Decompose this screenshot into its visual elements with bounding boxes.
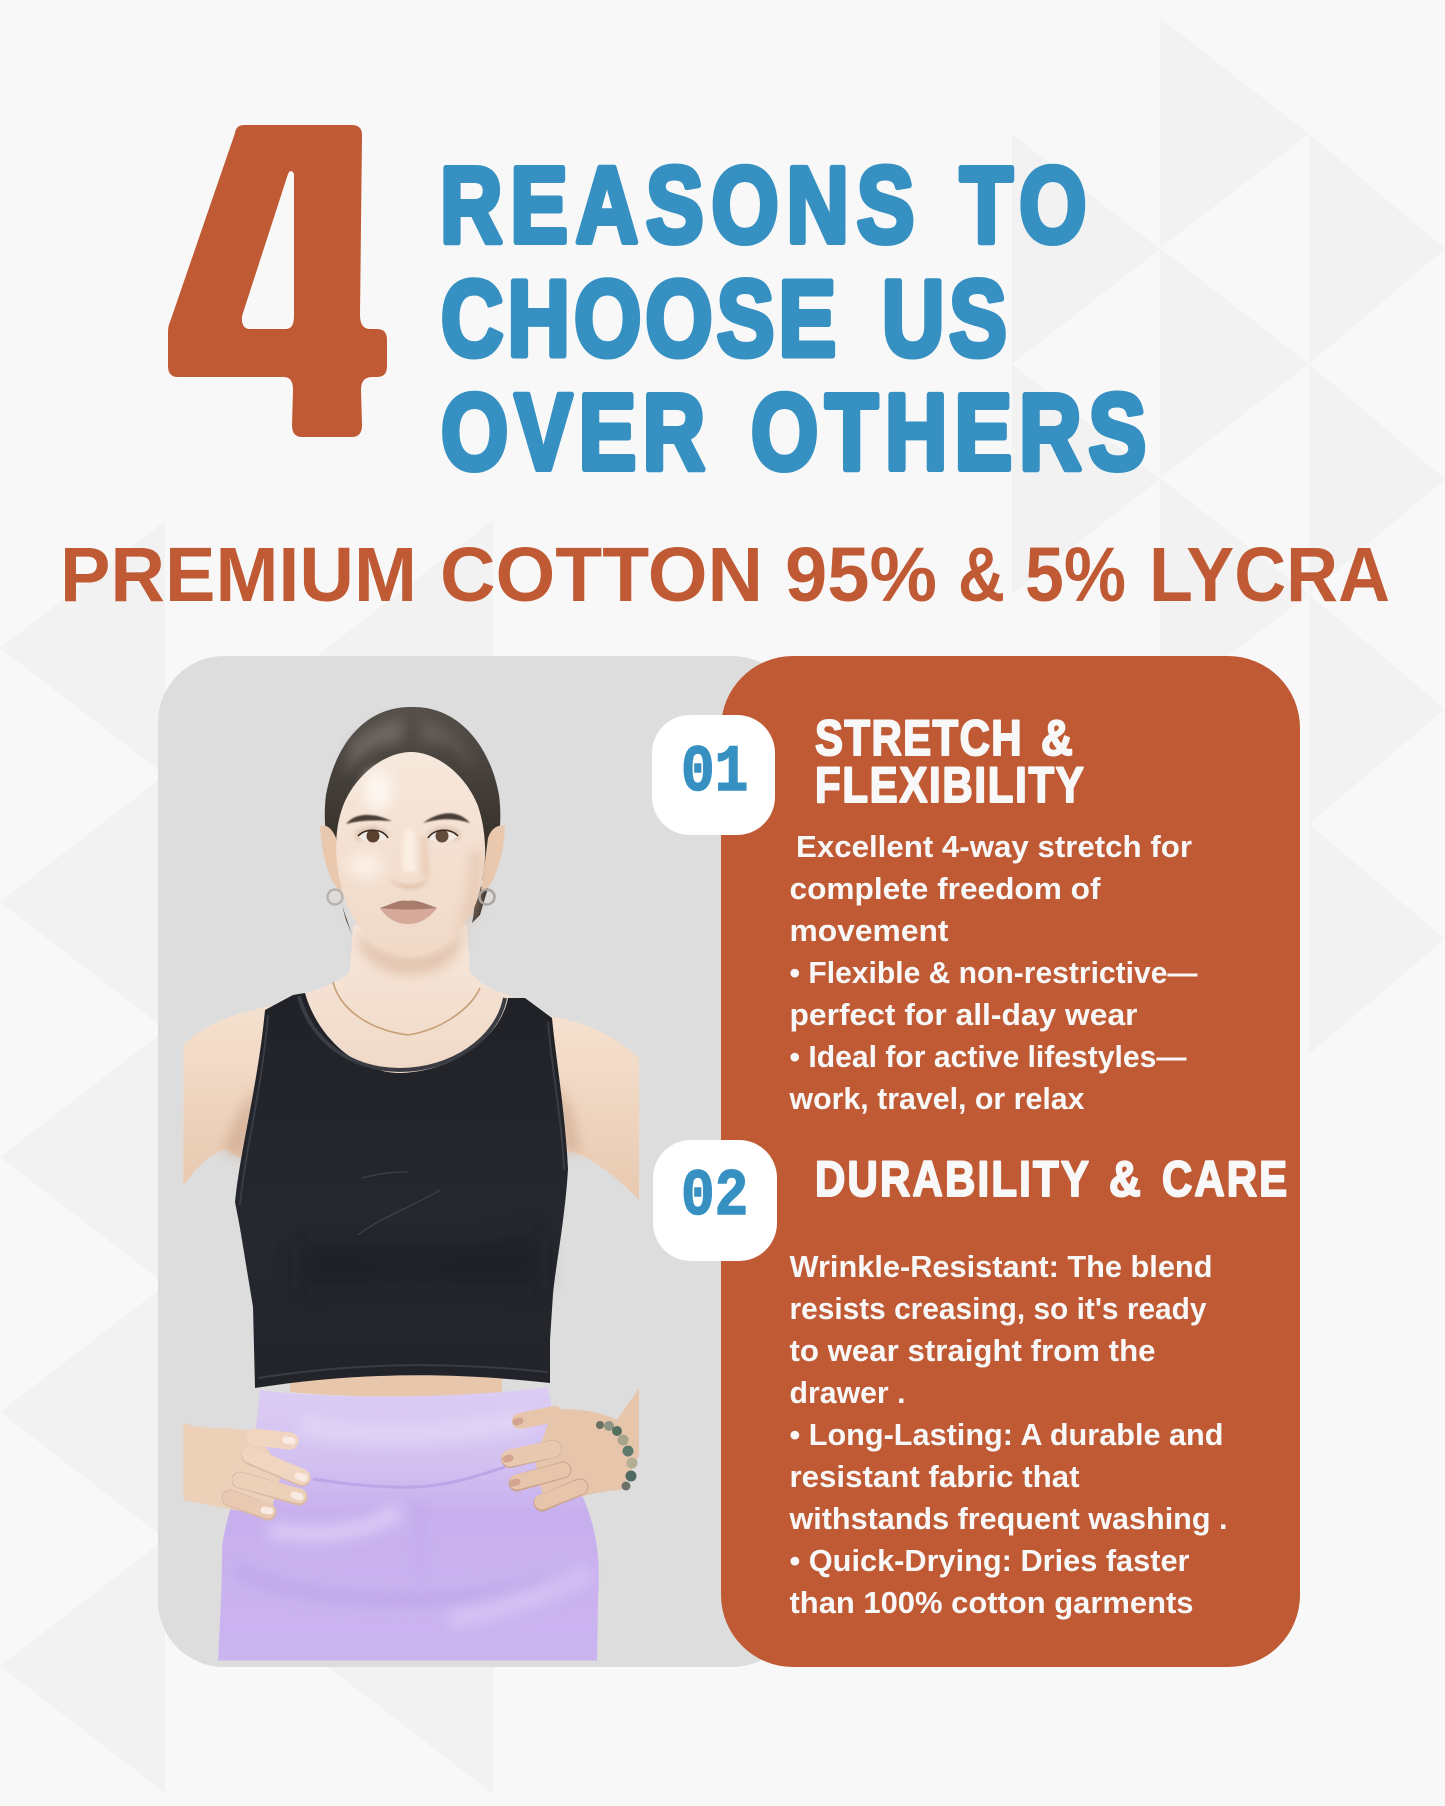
text block: durability details: resists creasing, so it's ready <box>790 1291 1207 1326</box>
photo: model in black crop top and lilac leggings <box>183 707 639 1662</box>
text block: stretch details: work, travel, or relax <box>789 1081 1085 1116</box>
leggings highlights and folds <box>235 1420 590 1620</box>
subtitle: fabric composition <box>60 532 1390 618</box>
earrings <box>328 890 342 904</box>
text block: stretch details: Excellent 4-way stretch for <box>796 829 1192 864</box>
eyes <box>358 831 458 842</box>
text block: durability details: to wear straight from the <box>790 1333 1156 1368</box>
armhole seams and hem <box>240 1015 564 1378</box>
text block: stretch details: complete freedom of <box>790 871 1101 906</box>
badge: 01: 01 <box>681 736 748 810</box>
subtitle: fabric composition: 95% <box>785 532 937 618</box>
text block: durability details: • Long-Lasting: A durable and <box>790 1417 1224 1452</box>
heading: durability and care: & <box>1109 1150 1141 1207</box>
ears <box>320 826 342 890</box>
heading: durability and care <box>815 1150 1287 1207</box>
text block: durability details: withstands frequent washing . <box>789 1501 1228 1536</box>
heading: stretch and flexibility: FLEXIBILITY <box>815 757 1084 813</box>
title: reasons to choose us over others: US <box>882 257 1007 379</box>
eye shadow <box>356 826 460 840</box>
text block: durability details <box>789 1249 1228 1620</box>
subtitle: fabric composition: 5% <box>1025 532 1126 618</box>
title: reasons to choose us over others: OVER <box>441 371 705 492</box>
left hand <box>183 1422 304 1515</box>
lips <box>380 908 437 924</box>
subtitle: fabric composition: & <box>958 532 1005 618</box>
badge: 01 <box>652 715 775 835</box>
text block: durability details: resistant fabric that <box>790 1459 1080 1494</box>
bracelet <box>596 1421 638 1490</box>
nose <box>390 878 428 888</box>
title: reasons to choose us over others: TO <box>960 144 1086 265</box>
black crop top <box>235 993 568 1388</box>
head and hair <box>320 707 505 957</box>
text block: stretch details: • Flexible & non-restrictive— <box>790 955 1198 990</box>
text block: stretch details: movement <box>790 913 948 948</box>
necklace <box>333 982 480 1035</box>
subtitle: fabric composition: LYCRA <box>1149 532 1390 618</box>
text block: stretch details <box>789 829 1198 1116</box>
panel: grey photo backdrop <box>158 656 798 1667</box>
face <box>336 752 485 957</box>
heading: durability and care: DURABILITY <box>815 1151 1089 1207</box>
title: reasons to choose us over others: REASONS <box>440 144 914 265</box>
arm shading <box>222 1080 580 1160</box>
forehead and cheek highlights <box>364 770 392 810</box>
leggings <box>218 1387 599 1662</box>
title: reasons to choose us over others <box>440 144 1146 492</box>
badge: 02: 02 <box>681 1160 748 1234</box>
waistband seam <box>313 1467 505 1487</box>
badge: 02 <box>653 1140 777 1261</box>
left arm <box>183 1006 272 1186</box>
neck and chest <box>300 925 515 1075</box>
top shading <box>300 1230 540 1290</box>
text block: durability details: than 100% cotton garments <box>790 1585 1194 1620</box>
heading: stretch and flexibility: STRETCH <box>815 710 1022 766</box>
midriff <box>290 1375 502 1396</box>
subtitle: fabric composition: COTTON <box>440 532 763 618</box>
right hand and forearm <box>506 1388 639 1505</box>
text block: stretch details: perfect for all-day wear <box>790 997 1138 1032</box>
text block: stretch details: • Ideal for active lifestyles— <box>790 1039 1186 1074</box>
panel: orange reasons card <box>721 656 1300 1667</box>
title: reasons to choose us over others: OTHERS <box>751 371 1146 492</box>
heading: stretch and flexibility <box>815 709 1084 813</box>
right arm <box>548 1016 639 1200</box>
title: reasons to choose us over others: CHOOSE <box>441 257 836 379</box>
text block: durability details: Wrinkle-Resistant: The blend <box>790 1249 1212 1284</box>
text block: durability details: drawer . <box>790 1375 906 1410</box>
heading: stretch and flexibility: & <box>1041 709 1073 766</box>
eyebrows <box>346 813 470 824</box>
neckline band <box>299 996 505 1070</box>
big numeral 4 <box>168 125 387 437</box>
text block: durability details: • Quick-Drying: Dries faster <box>790 1543 1190 1578</box>
subtitle: fabric composition: PREMIUM <box>60 532 417 618</box>
heading: durability and care: CARE <box>1162 1151 1287 1207</box>
